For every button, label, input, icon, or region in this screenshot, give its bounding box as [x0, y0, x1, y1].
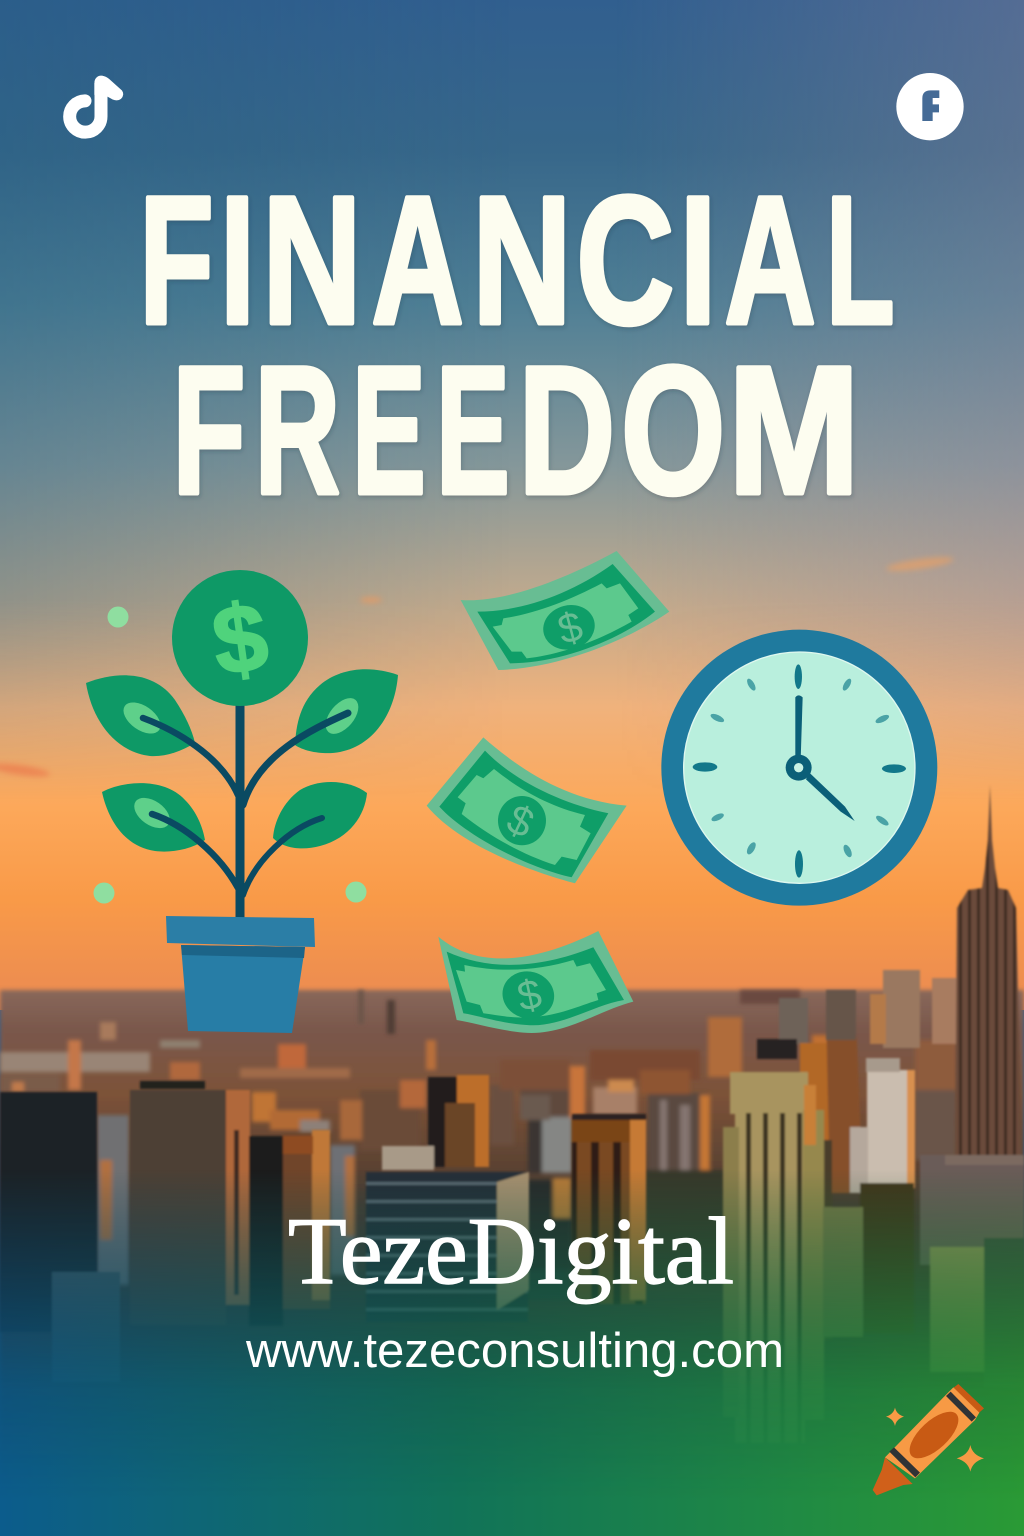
hour ticks	[693, 664, 906, 878]
background: sunset sky	[0, 0, 1024, 1010]
icon: tiktok note	[70, 76, 123, 132]
building: low tan block right	[930, 1247, 984, 1372]
illustration: falling dollar bills	[427, 551, 669, 1033]
bill: bottom	[438, 931, 633, 1033]
bill: bottom: $	[513, 969, 546, 1020]
building: empire state tower	[920, 785, 1024, 1265]
bottom blue-to-green gradient overlay	[0, 1183, 1024, 1536]
brand name: TezeDigital	[288, 1198, 734, 1304]
title: O	[621, 328, 725, 532]
title: F	[139, 158, 214, 362]
title: E	[352, 328, 426, 532]
building: tan striped tower	[723, 1072, 832, 1443]
city: distant midfield blocks	[0, 990, 957, 1300]
title	[139, 158, 894, 532]
building: olive block centre right	[823, 1207, 863, 1337]
leaf highlights	[118, 692, 365, 834]
title: R	[255, 328, 340, 532]
bill: top: $	[553, 602, 587, 653]
clock rim	[661, 630, 937, 906]
bill: middle	[427, 737, 627, 883]
clock hands	[786, 695, 855, 821]
illustration: clock	[661, 630, 937, 906]
title: I	[680, 158, 716, 362]
title: A	[372, 158, 464, 362]
dollar coin: $	[206, 583, 274, 696]
title: M	[728, 328, 860, 532]
illustration: money plant	[86, 570, 398, 1033]
clock face	[684, 652, 915, 883]
title: F	[172, 328, 245, 532]
bill: middle: $	[500, 795, 541, 847]
building: dark tower left	[0, 1092, 97, 1332]
flower pot	[166, 916, 315, 1033]
title: D	[518, 328, 615, 532]
plant leaves	[86, 669, 398, 852]
background: aerial city skyline	[0, 785, 1024, 1536]
title: I	[220, 158, 255, 362]
icon: crayon with sparkles	[873, 1384, 984, 1495]
bill: top	[461, 551, 669, 670]
title: L	[826, 158, 894, 362]
plant stem and branches	[143, 705, 348, 917]
building: copper tower	[572, 1114, 646, 1304]
dollar coin	[172, 570, 308, 706]
title: C	[576, 158, 674, 362]
title: N	[472, 158, 572, 362]
building: rounded-roof block far right	[984, 1238, 1024, 1388]
title: A	[724, 158, 816, 362]
building: far towers right	[757, 970, 958, 1193]
icon: facebook badge	[896, 73, 964, 140]
building: striped dark block	[366, 1146, 529, 1322]
plant decorative dots	[94, 606, 366, 904]
building: orange-lit tower	[249, 1130, 330, 1326]
title: E	[436, 328, 510, 532]
building: dark tower right	[860, 1183, 914, 1333]
website url: www.tezeconsulting.com	[245, 1324, 784, 1378]
building: white tower	[850, 1058, 915, 1193]
title: N	[262, 158, 362, 362]
building: brown tower left	[130, 1081, 250, 1325]
building: upper centre tower	[428, 1075, 489, 1167]
